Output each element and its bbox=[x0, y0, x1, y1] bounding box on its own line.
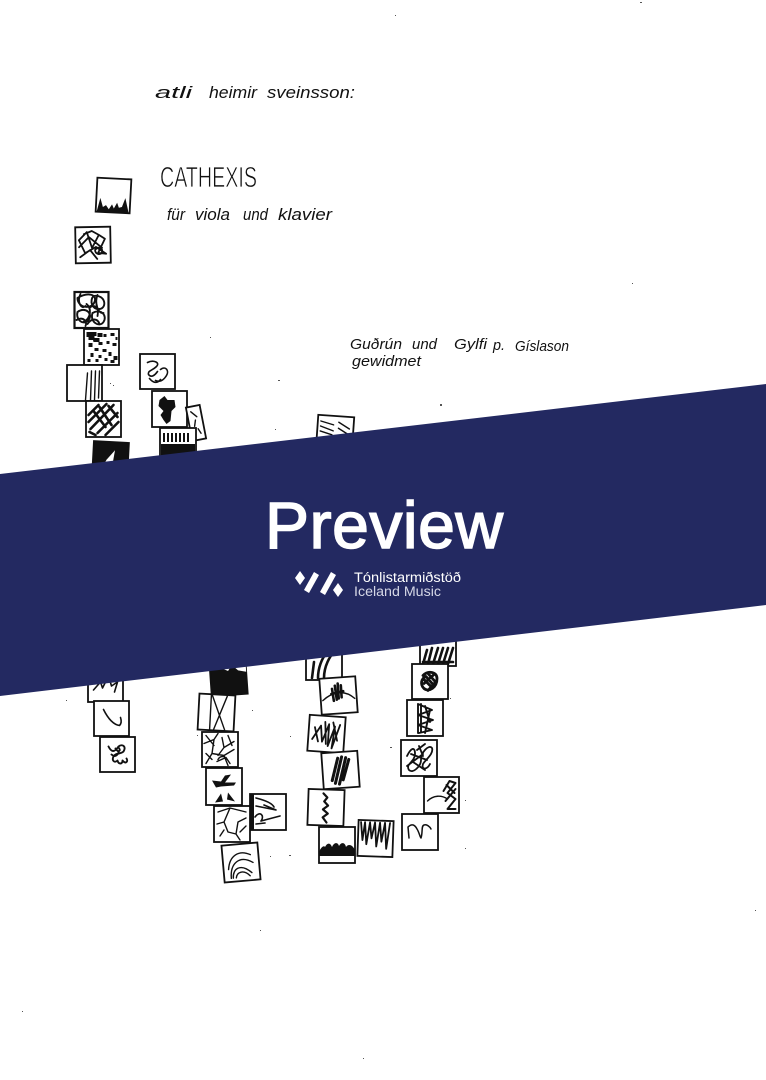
square: spikes bbox=[96, 178, 131, 213]
square: curly scribble bbox=[100, 737, 135, 772]
dedication: p. bbox=[492, 338, 505, 354]
square: web bbox=[75, 227, 111, 263]
heading: Preview: Preview bbox=[265, 488, 503, 562]
composer name: atli bbox=[155, 84, 194, 102]
square: scribble circles bbox=[74, 292, 108, 328]
square: vertical lines bbox=[67, 365, 102, 401]
square: black plume bbox=[152, 391, 187, 427]
dedication: Gíslason bbox=[515, 339, 569, 355]
square: zigzag bbox=[88, 666, 123, 702]
square: black motif and triangles bbox=[206, 768, 242, 805]
subtitle: für bbox=[167, 205, 186, 224]
square: keys bbox=[160, 428, 196, 464]
logo text: Iceland Music bbox=[354, 584, 441, 599]
square: black blot bbox=[412, 664, 448, 699]
graphic score squares bbox=[67, 178, 459, 882]
square: arcs bbox=[221, 843, 261, 882]
square: loose scribble bbox=[401, 740, 437, 776]
square: stroke bbox=[94, 701, 129, 736]
subtitle: und bbox=[243, 205, 268, 224]
subtitle: klavier bbox=[278, 205, 333, 224]
dedication: Gylfi bbox=[454, 337, 488, 353]
square: curved strokes bbox=[250, 794, 286, 830]
square: diagonal scribble bbox=[307, 715, 346, 753]
square: arc and hatch bbox=[424, 777, 459, 813]
title: Cathexis: CATHEXIS bbox=[160, 162, 257, 194]
square: squiggle bbox=[402, 814, 438, 850]
dedication: Guðrún bbox=[350, 337, 402, 353]
composer name: sveinsson: bbox=[267, 84, 355, 102]
square: curls bbox=[140, 354, 175, 389]
square: vertical scribble bbox=[407, 700, 443, 736]
subtitle bbox=[167, 205, 333, 224]
square: black landscape bbox=[209, 658, 248, 696]
square: lines bbox=[316, 415, 354, 453]
square: map lines bbox=[214, 806, 250, 842]
preview banner bbox=[0, 384, 766, 696]
square: cracked bbox=[202, 732, 238, 767]
square: dots bbox=[84, 329, 119, 365]
logo icon bbox=[295, 571, 343, 597]
square: arc with scribble bbox=[319, 676, 358, 715]
logo text: Tónlistarmiðstöð bbox=[354, 570, 461, 585]
square: hatched bbox=[420, 630, 456, 666]
square: crossed bbox=[198, 694, 235, 731]
square: narrow dotted bbox=[186, 405, 206, 441]
logo text bbox=[354, 570, 461, 599]
square: black waves bbox=[319, 827, 355, 863]
composer name: heimir bbox=[209, 84, 259, 102]
square: curved verticals bbox=[306, 644, 342, 680]
subtitle: viola bbox=[195, 205, 230, 224]
square: central scribble column bbox=[307, 789, 345, 826]
square: hanging strokes bbox=[357, 820, 394, 857]
dedication: und bbox=[412, 337, 438, 353]
square: black bbox=[92, 441, 129, 479]
square: dense scribble bbox=[321, 751, 360, 789]
dedication: gewidmet bbox=[352, 354, 422, 370]
square: diagonal strokes bbox=[86, 401, 121, 437]
composer name bbox=[155, 84, 355, 102]
dedication bbox=[350, 337, 569, 370]
